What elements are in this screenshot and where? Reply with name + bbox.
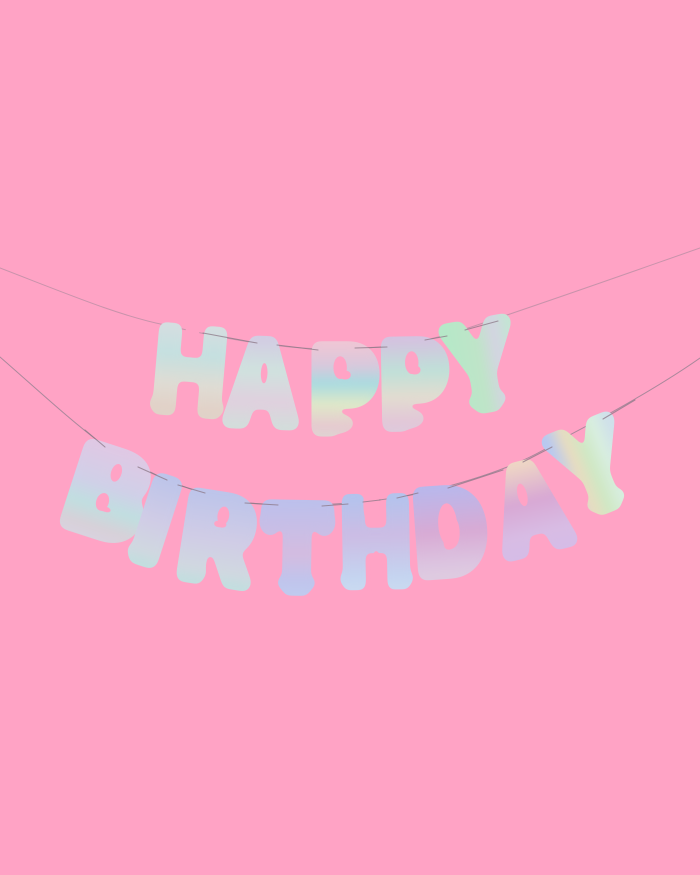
letter H: H	[339, 472, 413, 612]
letter A: A	[482, 438, 579, 579]
letter Y: Y	[439, 298, 524, 435]
upper string	[0, 248, 700, 349]
letter P: P	[312, 326, 376, 453]
letter I: I	[122, 457, 189, 586]
letter Y: Y	[537, 395, 648, 540]
letter P: P	[381, 321, 447, 448]
banner word: BIRTHDAY	[53, 395, 648, 613]
letter H: H	[147, 300, 232, 441]
banner word: HAPPY	[146, 298, 524, 453]
letter R: R	[173, 470, 262, 608]
letter B: B	[53, 422, 164, 566]
letter D: D	[412, 468, 489, 597]
letter A: A	[225, 320, 298, 447]
string segments threaded over letters	[85, 321, 635, 506]
letter T: T	[265, 482, 329, 612]
lower string	[0, 357, 700, 505]
